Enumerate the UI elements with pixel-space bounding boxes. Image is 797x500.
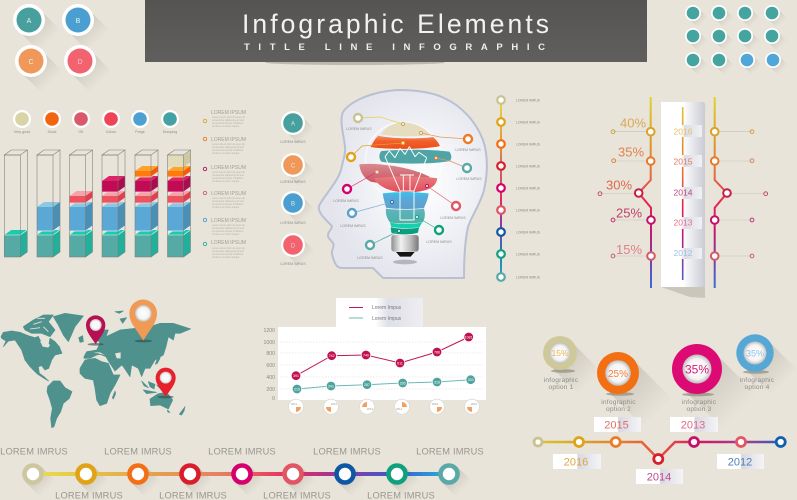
bar chart text list: consectetur adipiscing elit sed: [212, 119, 245, 122]
lettered buttons beside head: C: [291, 164, 296, 170]
percent labels: 25%: [616, 206, 642, 220]
lettered buttons beside head: [280, 111, 307, 266]
line chart: 786: [434, 350, 440, 354]
bulb callouts: LOREM IMRUS: [333, 199, 359, 203]
line chart: 2014: [396, 407, 403, 411]
line chart: 2012: [331, 402, 338, 406]
percent labels: [606, 116, 646, 257]
percent labels: 35%: [618, 144, 644, 160]
bar chart legend: [13, 110, 179, 134]
lettered buttons top left: D: [77, 59, 83, 66]
bar chart text list: do eiusmod tempor incididunt: [212, 177, 244, 180]
percent labels: 30%: [606, 178, 632, 192]
axis labels: 400: [266, 375, 275, 381]
year line timeline: 2012: [728, 456, 752, 468]
scroll timeline with percentages: 2015: [674, 156, 693, 166]
year tags: [665, 125, 702, 259]
line chart: 316: [434, 380, 440, 384]
greenland: [53, 313, 83, 342]
line chart: 611: [397, 361, 403, 365]
bulb callouts: LOREM IMRUS: [456, 177, 482, 181]
line chart: 295: [400, 381, 406, 385]
paper shadow: [661, 287, 705, 298]
axis labels: 200: [266, 387, 275, 393]
vertical node timeline: LOREM IMRUS: [516, 186, 541, 190]
teal layer: [379, 150, 451, 164]
bar chart text list: LOREM IPSUM: [211, 165, 246, 171]
grid: [280, 342, 483, 389]
title banner: [145, 0, 647, 65]
teal-blue layer: [386, 209, 425, 223]
percent option circles: infographic: [544, 377, 579, 384]
lettered buttons beside head: LOREM IMRUS: [280, 221, 306, 225]
vertical node timeline: LOREM IMRUS: [516, 252, 541, 256]
bar chart legend: OK: [78, 130, 84, 134]
bar chart text list: ut labore et dolore magna: [212, 206, 240, 209]
stacked 3D bar chart: [4, 150, 190, 257]
socket: [391, 235, 419, 252]
percent labels: 15%: [616, 242, 642, 257]
bar chart text list: LOREM IPSUM: [211, 218, 246, 224]
bar chart text list: Lorem ipsum dolor sit amet elit: [212, 143, 245, 146]
line chart: Lorem Impus: [372, 316, 402, 322]
bulb callouts: LOREM IMRUS: [455, 148, 481, 152]
axis labels: 0: [272, 396, 275, 402]
bar chart text list: consectetur adipiscing elit sed: [212, 146, 245, 149]
bar chart text list: ut labore et dolore magna: [212, 233, 240, 236]
line chart: 267: [364, 383, 370, 387]
bar chart text list: Lorem ipsum dolor sit amet elit: [212, 171, 245, 174]
orange layer: [371, 136, 440, 149]
bulb callouts: LOREM IMRUS: [340, 224, 366, 228]
scroll timeline with percentages: 2016: [674, 126, 693, 136]
percent option circles: 35%: [685, 362, 709, 376]
percent option circles: 25%: [608, 369, 628, 380]
paper: [661, 102, 705, 287]
axis labels: 600: [266, 363, 275, 369]
lettered buttons beside head: LOREM IMRUS: [280, 262, 306, 266]
lettered buttons beside head: LOREM IMRUS: [280, 180, 306, 184]
lettered buttons top left: [13, 4, 101, 82]
line chart: 742: [329, 354, 335, 358]
bar chart text list: do eiusmod tempor incididunt: [212, 122, 244, 125]
bar chart text list: ut labore et dolore magna: [212, 125, 240, 128]
bulb callouts: LOREM IMRUS: [346, 127, 372, 131]
line chart: 1081: [465, 335, 473, 339]
axis labels: [263, 328, 275, 402]
bar chart text list: consectetur adipiscing elit sed: [212, 227, 245, 230]
axis labels: 800: [266, 351, 275, 357]
lettered buttons top left: C: [28, 59, 34, 66]
percent option circles: 15%: [551, 348, 569, 358]
bar chart legend: Purge: [135, 130, 145, 134]
line chart: 2013: [367, 407, 374, 411]
lightbulb stacked layers: [359, 122, 451, 264]
bar chart text list: do eiusmod tempor incididunt: [212, 230, 244, 233]
lettered buttons beside head: A: [291, 122, 295, 128]
year line timeline: 2015: [604, 420, 629, 432]
bar chart text list: do eiusmod tempor incididunt: [212, 149, 244, 152]
percent option circles: [543, 334, 785, 413]
year line timeline: 2016: [564, 456, 588, 468]
line chart: 391: [293, 374, 299, 378]
horizontal node timeline: LOREM IMRUS: [0, 446, 68, 456]
bulb callouts: LOREM IMRUS: [426, 240, 452, 244]
lettered buttons top left: A: [27, 18, 32, 25]
line chart: 333: [468, 378, 474, 382]
map background-coloured inlets: [30, 318, 121, 358]
vertical node timeline: LOREM IMRUS: [516, 142, 541, 146]
dome layer: [381, 122, 431, 136]
line chart: [263, 298, 486, 414]
axis labels: 1200: [263, 328, 275, 334]
vertical node timeline: LOREM IMRUS: [516, 164, 541, 168]
blue layer: [383, 192, 429, 209]
lettered buttons top left: B: [76, 18, 81, 25]
lettered buttons beside head: B: [291, 202, 295, 208]
bar chart text list: LOREM IPSUM: [211, 240, 246, 246]
scroll timeline with percentages: [598, 97, 768, 298]
year pie badges: [288, 399, 480, 414]
percent option circles: infographic: [740, 377, 775, 384]
line chart: 2016: [471, 402, 478, 406]
nodes: [635, 128, 731, 260]
year line timeline: [534, 417, 785, 484]
teal series: [297, 380, 471, 389]
horizontal node timeline: LOREM IMRUS: [416, 446, 484, 456]
bar chart text list: do eiusmod tempor incididunt: [212, 253, 244, 256]
vertical node timeline: LOREM IMRUS: [516, 230, 541, 234]
coral layer: [374, 176, 437, 192]
bar chart text list: LOREM IPSUM: [211, 137, 246, 143]
year line timeline: 2014: [647, 472, 671, 484]
filament: [385, 147, 427, 220]
vertical node timeline: LOREM IMRUS: [516, 98, 541, 102]
north america: [1, 331, 62, 381]
scroll timeline with percentages: 2014: [674, 188, 693, 198]
bulb callouts: LOREM IMRUS: [440, 216, 466, 220]
bar chart text list: ut labore et dolore magna: [212, 256, 240, 259]
bar chart text list: ut labore et dolore magna: [212, 180, 240, 183]
bar chart text list: Lorem ipsum dolor sit amet elit: [212, 116, 245, 119]
connector lines: [600, 132, 766, 256]
arctic islands: [23, 315, 55, 337]
line chart: 2011: [291, 402, 297, 406]
bulb callouts: LOREM IMRUS: [357, 256, 383, 260]
axis labels: 1000: [263, 340, 275, 346]
bulb callouts: [333, 114, 482, 260]
subtitle: TITLE LINE INFOGRAPHIC: [244, 42, 545, 53]
bar chart text list: [203, 110, 246, 259]
eurasia: [84, 323, 191, 377]
year line timeline: 2013: [681, 420, 705, 432]
islands: [79, 311, 185, 415]
map pins: [86, 300, 176, 398]
bulb shadow: [393, 260, 417, 264]
rose layer: [359, 164, 430, 183]
lettered buttons beside head: D: [291, 244, 296, 250]
horizontal node timeline: [0, 446, 484, 500]
line chart: Lorem Impus: [372, 305, 402, 311]
line chart: 241: [328, 384, 334, 388]
dot grid top right: [685, 5, 783, 70]
side lines: [639, 97, 651, 288]
vertical node timeline: LOREM IMRUS: [516, 120, 541, 124]
line chart: 2015: [432, 402, 439, 406]
bar chart text list: LOREM IPSUM: [211, 191, 246, 197]
bar chart legend: Very good: [14, 130, 30, 134]
vertical node timeline: LOREM IMRUS: [516, 208, 541, 212]
percent option circles: infographic: [601, 399, 636, 406]
line chart: 215: [294, 387, 300, 391]
bar chart legend: Good: [48, 130, 56, 134]
bar chart text list: do eiusmod tempor incididunt: [212, 203, 244, 206]
center line: [682, 107, 684, 280]
dark green layer: [391, 227, 419, 234]
australia: [150, 392, 173, 409]
vertical node timeline: LOREM IMRUS: [516, 276, 541, 280]
bar chart text list: consectetur adipiscing elit sed: [212, 200, 245, 203]
africa: [80, 358, 120, 406]
horizontal node timeline: LOREM IMRUS: [104, 446, 172, 456]
legend panel: [340, 326, 420, 332]
south america: [47, 381, 72, 428]
percent option circles: option 1: [548, 384, 574, 391]
percent option circles: infographic: [682, 399, 717, 406]
scroll timeline with percentages: 2013: [674, 218, 693, 228]
world map: [1, 311, 191, 428]
bar chart text list: Lorem ipsum dolor sit amet elit: [212, 247, 245, 250]
scroll timeline with percentages: 2012: [674, 248, 693, 258]
crimson series: [296, 337, 469, 376]
plot area: [278, 327, 486, 400]
bar chart legend: Colour: [106, 130, 117, 134]
percent option circles: option 3: [686, 406, 712, 413]
title: Infographic Elements: [242, 9, 549, 39]
bar chart text list: consectetur adipiscing elit sed: [212, 174, 245, 177]
bar chart legend: Dumping: [163, 130, 177, 134]
percent option circles: 35%: [746, 348, 764, 358]
line chart: 740: [363, 353, 369, 357]
bar chart text list: consectetur adipiscing elit sed: [212, 250, 245, 253]
percent labels: 40%: [620, 116, 646, 130]
bar chart text list: LOREM IPSUM: [211, 110, 246, 116]
bright green layer: [390, 223, 422, 228]
bar chart text list: Lorem ipsum dolor sit amet elit: [212, 224, 245, 227]
end dots: [598, 130, 768, 258]
horizontal node timeline: LOREM IMRUS: [313, 446, 381, 456]
vertical node timeline: [497, 96, 541, 281]
percent option circles: option 4: [744, 384, 770, 391]
bar chart text list: Lorem ipsum dolor sit amet elit: [212, 197, 245, 200]
bar chart text list: ut labore et dolore magna: [212, 152, 240, 155]
lettered buttons beside head: LOREM IMRUS: [280, 140, 306, 144]
percent option circles: option 2: [606, 406, 631, 413]
head silhouette: [319, 90, 487, 278]
bulb outline: [366, 122, 442, 194]
horizontal node timeline: LOREM IMRUS: [208, 446, 276, 456]
